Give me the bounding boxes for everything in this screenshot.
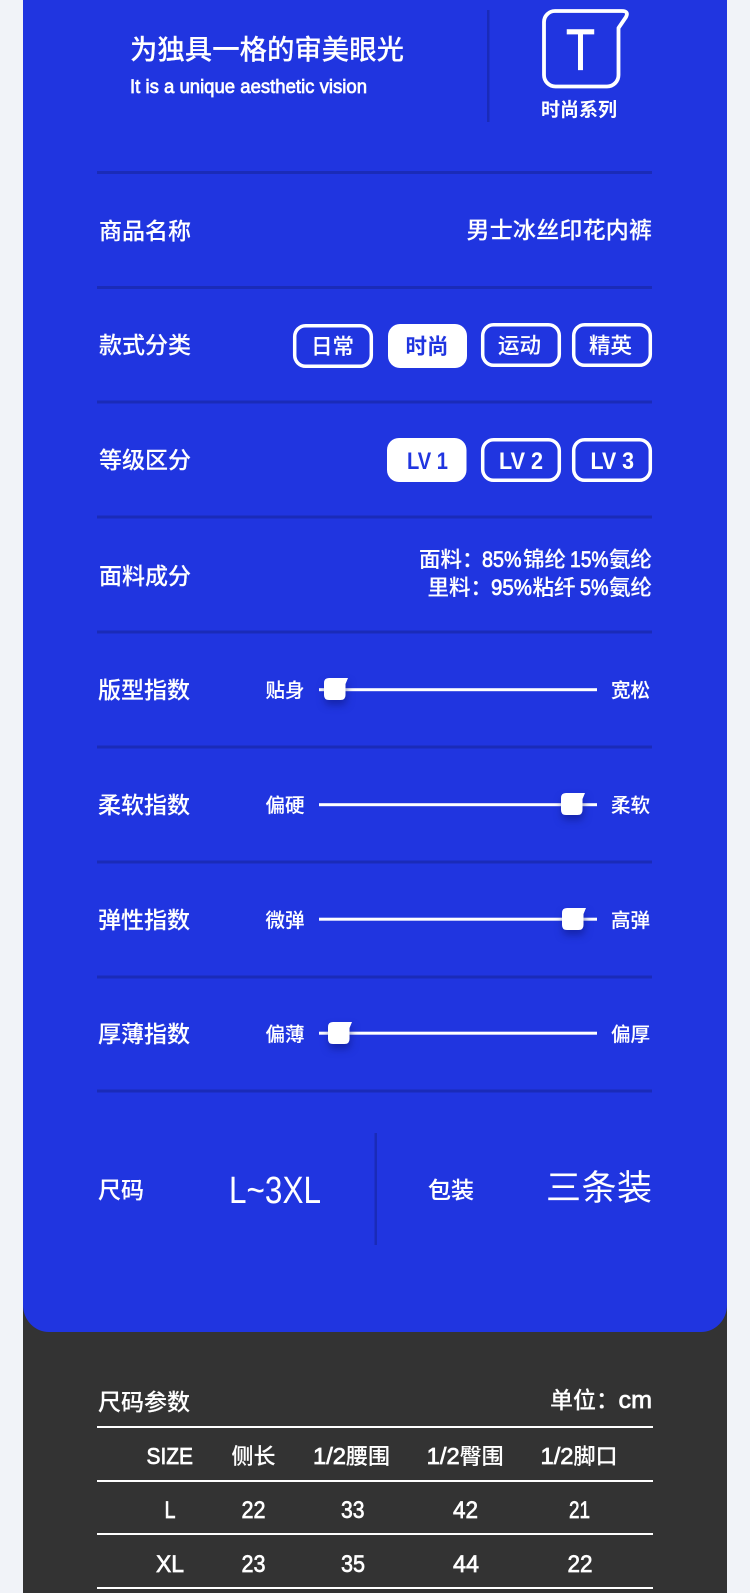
row: size range and packaging: 尺码: [98, 1177, 144, 1203]
row: product name: 商品名称: [99, 218, 191, 244]
button: fashion selected: 时尚: [406, 335, 448, 359]
row: softness index slider: 柔软: [611, 795, 650, 817]
icon: fashion series T tag: [541, 11, 627, 121]
table unit: 单位：: [550, 1387, 619, 1413]
panel: blue product info card: [23, 0, 727, 1332]
row: fabric composition: [99, 547, 652, 600]
row: size range and packaging: [98, 1133, 652, 1245]
button: LV 1 selected: LV 1: [407, 448, 448, 475]
table row L: 33: [341, 1497, 364, 1524]
table row XL: [156, 1551, 592, 1578]
row: size range and packaging: 包装: [428, 1177, 474, 1203]
row: size range and packaging: L~3XL: [229, 1170, 321, 1212]
table header row: 腰围: [346, 1444, 390, 1469]
row: fabric composition: 锦纶: [523, 548, 566, 572]
button: daily: 日常: [311, 335, 354, 359]
table unit: [550, 1387, 652, 1414]
row: fabric composition: 氨纶: [609, 576, 652, 600]
row: level: [99, 438, 650, 482]
row: thickness index slider: 厚薄指数: [98, 1021, 190, 1047]
row: fabric composition: 粘纤: [532, 576, 576, 600]
row: fit index slider: 贴身: [266, 680, 304, 702]
row: fit index slider: 版型指数: [98, 677, 190, 703]
button: sport: [483, 325, 559, 365]
row: thickness index slider: 偏厚: [611, 1024, 650, 1046]
table: size parameters: [97, 1387, 653, 1589]
row: fabric composition: 85%: [482, 547, 522, 572]
table row XL: 35: [341, 1551, 365, 1578]
row: elasticity index slider: 微弹: [266, 910, 304, 932]
table header row: 1/2: [540, 1443, 574, 1469]
table row L: 42: [453, 1497, 478, 1524]
table unit: cm: [618, 1387, 652, 1414]
row: fabric composition: 里料：: [428, 576, 492, 600]
row: softness index slider: 偏硬: [266, 795, 304, 817]
table header row: 侧长: [232, 1444, 276, 1469]
table title: 尺码参数: [98, 1389, 190, 1415]
button: LV 3: [574, 440, 650, 480]
row: fit index slider: [98, 677, 650, 703]
button: fashion selected: [388, 324, 467, 368]
table header row: [146, 1443, 618, 1469]
row: fabric composition: 面料：: [419, 548, 484, 572]
row: fabric composition: 氨纶: [609, 548, 652, 572]
row: softness index slider: 柔软指数: [98, 792, 190, 818]
row: fabric composition: 面料成分: [99, 563, 191, 589]
table header row: 脚口: [574, 1444, 618, 1469]
row: fabric composition: 95%: [491, 575, 532, 600]
heading: title block: It is a unique aesthetic vision: [130, 76, 367, 98]
row: fabric composition: 15%: [570, 547, 608, 572]
table header row: SIZE: [146, 1443, 193, 1469]
icon: fashion series T tag: 时尚系列: [541, 99, 617, 121]
table row XL: 23: [242, 1551, 266, 1578]
table row XL: 44: [453, 1551, 479, 1578]
row: size range and packaging: 三条装: [546, 1169, 652, 1208]
button: elite: 精英: [589, 334, 632, 358]
row: softness index slider: [98, 792, 650, 818]
table row XL: 22: [568, 1551, 592, 1578]
row: product name: 男士冰丝印花内裤: [466, 217, 652, 243]
table header row: 1/2: [313, 1443, 346, 1469]
row: thickness index slider: [98, 1021, 650, 1047]
button: LV 2: [483, 440, 559, 480]
row: elasticity index slider: 弹性指数: [98, 907, 190, 933]
table row L: 22: [242, 1497, 266, 1524]
table row XL: XL: [156, 1551, 184, 1578]
row: level: 等级区分: [99, 447, 191, 473]
table header row: 臀围: [460, 1444, 504, 1469]
table row L: [164, 1497, 590, 1524]
button: LV 2: LV 2: [499, 448, 543, 475]
table row L: 21: [569, 1497, 590, 1524]
icon: fashion series T tag: T: [566, 18, 595, 83]
button: elite: [574, 325, 650, 365]
row: product name: [99, 217, 652, 244]
button: LV 3: LV 3: [590, 448, 634, 475]
heading: title block: 为独具一格的审美眼光: [130, 34, 404, 65]
panel: dark size table background: [23, 1290, 727, 1593]
row: thickness index slider: 偏薄: [266, 1024, 304, 1046]
button: daily: [295, 326, 371, 366]
row: elasticity index slider: [98, 907, 650, 933]
row: fabric composition: 5%: [580, 575, 608, 600]
button: LV 1 selected: [387, 438, 466, 482]
table header row: 1/2: [427, 1443, 460, 1469]
heading: title block: [130, 34, 404, 98]
row: style category: 款式分类: [99, 332, 191, 358]
button: sport: 运动: [498, 334, 541, 358]
row: elasticity index slider: 高弹: [611, 910, 650, 932]
table row L: L: [164, 1497, 176, 1524]
row: fit index slider: 宽松: [611, 680, 650, 702]
row: style category: [99, 324, 650, 368]
